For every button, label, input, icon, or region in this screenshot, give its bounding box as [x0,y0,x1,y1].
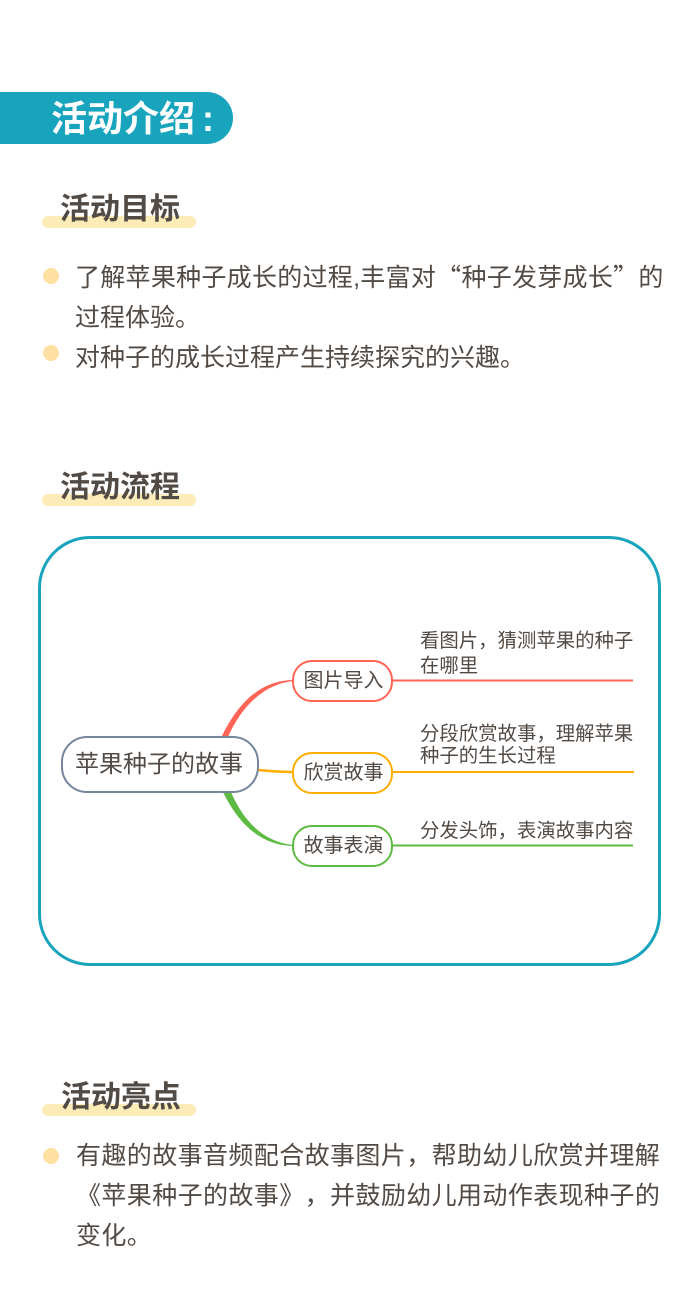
bullet 1 [43,268,59,284]
bullet 2 [43,345,59,361]
bullet 3 [43,1148,59,1164]
heading underline: 活动目标 [42,216,196,228]
heading: 活动目标: 活动目标 [60,193,180,226]
text: goal 1: 了解苹果种子成长的过程,丰富对“种子发芽成长”的 [75,258,664,294]
node: 图片导入 [292,660,393,702]
banner title: 活动介绍: [51,98,214,139]
branch text 2 [420,717,633,767]
branch text 2: 种子的生长过程 [420,745,556,767]
node: 图片导入: 图片导入 [304,670,384,692]
text: highlight line 1: 有趣的故事音频配合故事图片，帮助幼儿欣赏并理解 [76,1136,660,1172]
branch text 1: 在哪里 [420,655,478,677]
text: goal 1 continued: 过程体验。 [75,304,200,332]
node: 故事表演 [292,825,393,867]
panel: mind map [38,536,661,966]
branch text 1 [420,624,633,677]
node: 欣赏故事: 欣赏故事 [304,762,384,784]
heading: 活动流程: 活动流程 [60,471,180,504]
node: root: 苹果种子的故事 [75,751,243,778]
heading: 活动亮点: 活动亮点 [61,1081,181,1114]
node: root [61,736,259,793]
text: highlight line 2: 《苹果种子的故事》，并鼓励幼儿用动作表现种子的 [76,1176,660,1212]
heading underline: 活动流程 [42,494,196,506]
text: highlight line 3: 变化。 [76,1222,152,1250]
branch text 2: 分段欣赏故事，理解苹果 [420,717,633,746]
branch text 1: 看图片，猜测苹果的种子 [420,624,633,653]
branch text 3: 分发头饰，表演故事内容 [420,814,633,843]
heading underline: 活动亮点 [42,1104,196,1116]
node: 欣赏故事 [292,752,393,794]
node: 故事表演: 故事表演 [304,835,384,857]
banner: 活动介绍 [0,92,233,144]
text: goal 2: 对种子的成长过程产生持续探究的兴趣。 [75,344,525,372]
